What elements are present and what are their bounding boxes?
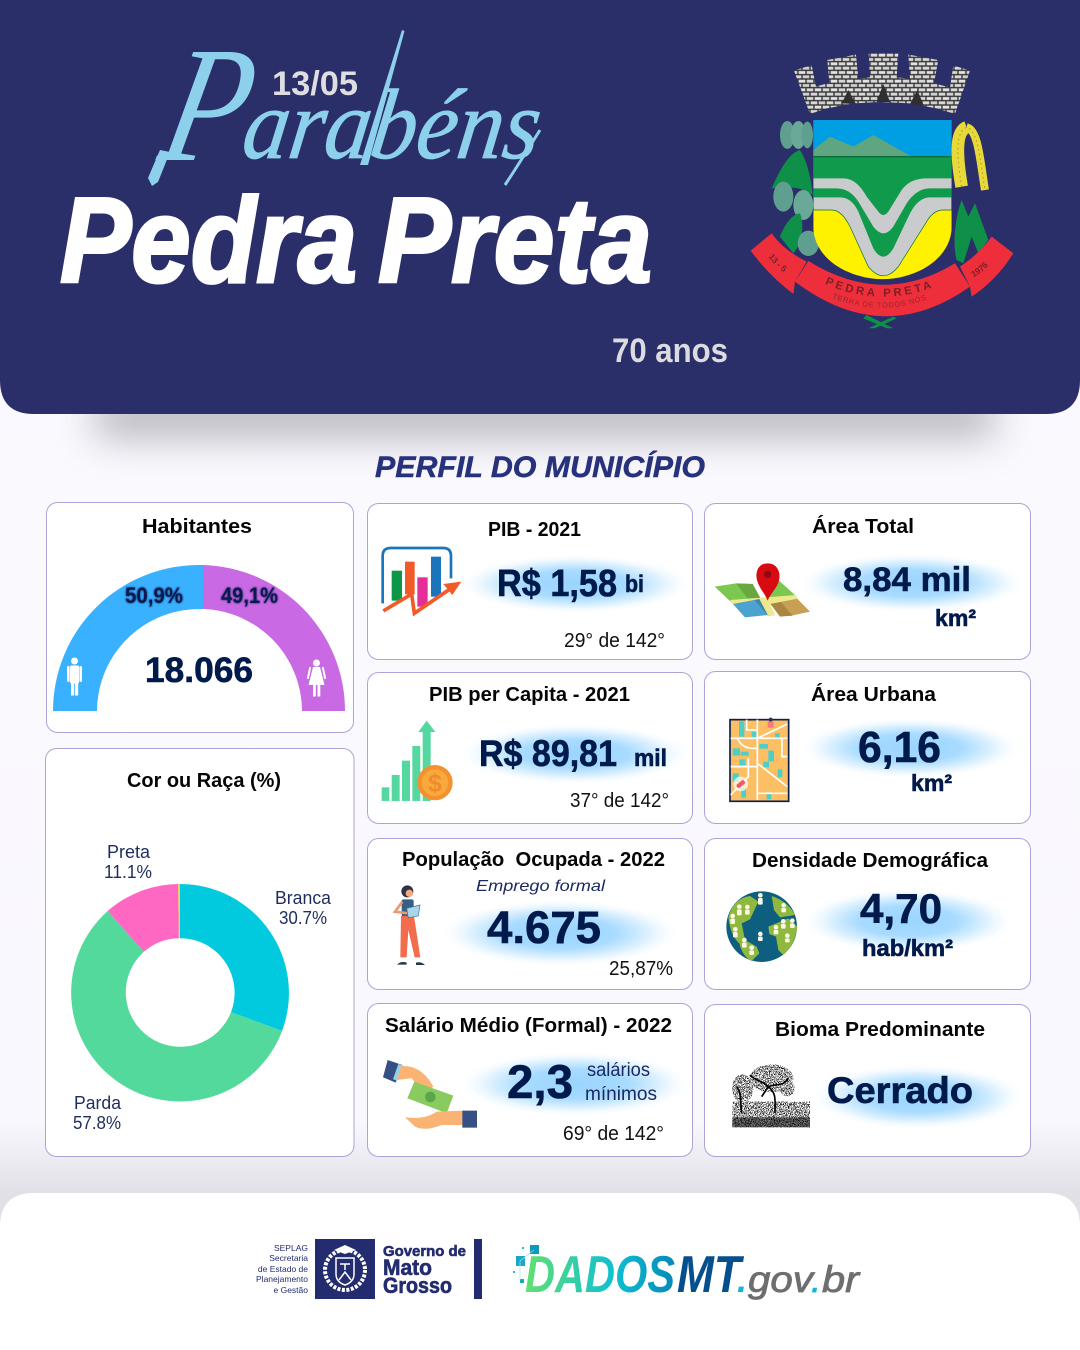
value: R$ 1,58	[497, 563, 617, 605]
SEPLAG text	[256, 1243, 308, 1295]
icon: map with pin	[715, 563, 810, 617]
shield	[810, 118, 955, 282]
ribbon: 1976	[971, 262, 988, 278]
heading: Área Urbana	[811, 683, 937, 706]
heading: População Ocupada - 2022	[402, 849, 665, 871]
total population: 18.066	[145, 651, 253, 690]
panel: Habitantes	[46, 502, 354, 732]
ranking: 37° de 142°	[570, 790, 669, 812]
male percentage: 50,9%	[125, 583, 183, 608]
icon: cerrado landscape	[732, 1064, 810, 1127]
icon: data nodes	[513, 1245, 539, 1283]
wheat and corn	[955, 127, 988, 263]
date: 13/05	[272, 65, 358, 103]
value: 6,16	[858, 723, 941, 772]
unit: mil	[634, 745, 667, 772]
value: Cerrado	[827, 1070, 973, 1111]
value glow	[797, 717, 1023, 779]
subheading: Emprego formal	[476, 878, 605, 895]
panel: Cor ou Raça	[46, 748, 354, 1156]
state name: Grosso	[383, 1273, 452, 1298]
label: Preta: Preta	[107, 842, 151, 862]
donut chart	[71, 884, 289, 1101]
gov.br: gov	[748, 1259, 816, 1300]
label: Branca: 30.7%	[279, 908, 327, 928]
icon: growth and coin: $	[428, 771, 442, 798]
heading: Densidade Demográfica	[752, 850, 989, 872]
anniversary: 70 anos	[612, 332, 728, 370]
city name: Preta	[378, 172, 652, 308]
panel: footer	[0, 1193, 1080, 1350]
unit: bi	[625, 571, 644, 598]
value glow	[438, 899, 682, 967]
label: Preta	[104, 842, 152, 882]
value: 4.675	[487, 902, 601, 953]
female percentage: 49,1%	[221, 583, 278, 608]
DADOS MT logo: .	[737, 1259, 747, 1300]
state name	[383, 1243, 466, 1298]
SEPLAG text: SEPLAG	[274, 1243, 308, 1253]
icon: woman	[307, 660, 326, 696]
value glow	[809, 1064, 1027, 1130]
state name: Mato	[383, 1255, 432, 1280]
icon: globe with people	[726, 891, 797, 962]
ranking: 29° de 142°	[564, 630, 665, 652]
value glow	[800, 888, 1016, 954]
icon: growth and coin	[382, 721, 453, 801]
value glow	[457, 1051, 693, 1117]
value: 4,70	[860, 885, 942, 932]
icon: municipal coat of arms	[750, 53, 1014, 328]
SEPLAG text: Planejamento	[256, 1274, 308, 1284]
label: Branca	[275, 888, 332, 928]
divider bar	[474, 1239, 482, 1299]
script title: Parabéns: P	[147, 14, 271, 197]
heading: PIB - 2021	[488, 519, 581, 541]
city name: Pedra	[60, 172, 357, 308]
panel: PIB	[368, 504, 693, 660]
value glow	[457, 723, 693, 785]
heading: Habitantes	[142, 516, 252, 538]
heading: Área Total	[812, 515, 914, 538]
ribbon: PEDRA PRETA	[826, 277, 932, 297]
gov.br: .	[811, 1259, 821, 1300]
heading: PIB per Capita - 2021	[429, 684, 630, 706]
share: 25,87%	[609, 958, 673, 980]
unit: km²	[911, 770, 952, 796]
gauge: female share	[203, 565, 345, 711]
panel: Bioma Predominante	[704, 1004, 1030, 1156]
section heading: PERFIL DO MUNICÍPIO	[375, 450, 705, 484]
ribbon: 13 - 5	[768, 254, 787, 272]
unit: salários	[587, 1060, 650, 1081]
script title: Parabéns: arabéns	[237, 68, 549, 180]
ribbon	[750, 233, 1014, 328]
female percentage: 49,1%	[221, 583, 278, 608]
gauge: male share	[53, 565, 203, 711]
script title: Parabéns	[147, 14, 549, 197]
crown	[794, 53, 970, 114]
panel: Salário Médio	[368, 1004, 693, 1156]
ribbon: TERRA DE TODOS NÓS	[834, 294, 926, 308]
left leaves	[772, 121, 819, 256]
panel: Área Total	[704, 504, 1030, 660]
unit: hab/km²	[862, 935, 953, 961]
panel: População Ocupada	[368, 838, 692, 990]
unit: mínimos	[585, 1084, 657, 1105]
heading: Salário Médio (Formal) - 2022	[385, 1015, 672, 1037]
heading: Cor ou Raça (%)	[127, 770, 281, 792]
unit: km²	[935, 605, 976, 631]
icon: man	[67, 658, 82, 696]
unit	[585, 1060, 657, 1105]
value glow	[796, 553, 1028, 613]
panel: PIB per Capita	[368, 672, 693, 824]
state name: Governo de	[383, 1243, 466, 1260]
male percentage: 50,9%	[125, 583, 183, 608]
SEPLAG text: Secretaria	[269, 1253, 308, 1263]
panel: Área Urbana	[704, 672, 1030, 824]
gov.br: br	[822, 1259, 861, 1300]
value: 2,3	[507, 1055, 573, 1108]
gov.br	[748, 1259, 861, 1300]
SEPLAG text: e Gestão	[274, 1285, 308, 1295]
icon: city map	[730, 718, 789, 801]
icon: chart	[383, 548, 461, 613]
label: Preta: 11.1%	[104, 862, 152, 882]
icon: state emblem	[315, 1239, 375, 1299]
icon: money between hands	[383, 1060, 477, 1129]
label: Parda	[73, 1093, 122, 1133]
heading: Bioma Predominante	[775, 1019, 985, 1041]
DADOS MT logo: DADOS	[525, 1246, 675, 1304]
icon: woman reading	[395, 885, 425, 965]
DADOS MT logo: MT	[677, 1246, 745, 1304]
value: 8,84 mil	[843, 561, 971, 599]
ranking: 69° de 142°	[563, 1123, 664, 1145]
city name	[60, 172, 652, 308]
SEPLAG text: de Estado de	[258, 1264, 308, 1274]
value: R$ 89,81	[479, 733, 617, 774]
header shadow	[95, 395, 995, 437]
panel: Densidade Demográfica	[704, 838, 1030, 990]
value glow	[457, 554, 693, 614]
panel: header banner	[0, 0, 1080, 414]
label: Parda: Parda	[74, 1093, 122, 1113]
label: Branca: Branca	[275, 888, 332, 908]
label: Parda: 57.8%	[73, 1113, 121, 1133]
